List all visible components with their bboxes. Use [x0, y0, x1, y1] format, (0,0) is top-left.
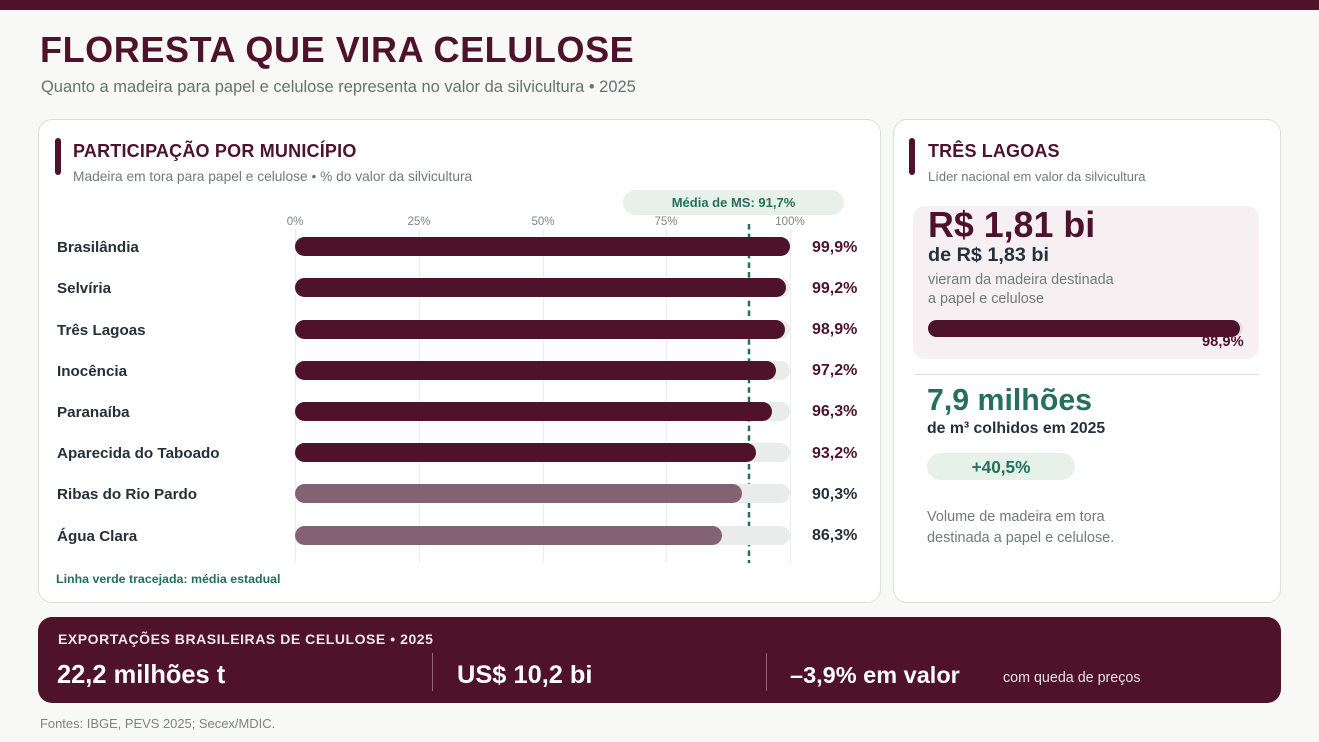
- panel subheading: Madeira em tora para papel e celulose • % do valor da silvicultura: [73, 169, 472, 184]
- volume description: Volume de madeira em tora: [927, 509, 1105, 525]
- text: 75%: [654, 216, 678, 228]
- export note: com queda de preços: [1003, 670, 1140, 686]
- text: 100%: [775, 216, 805, 228]
- bar: Ribas do Rio Pardo: [57, 484, 857, 503]
- export heading: EXPORTAÇÕES BRASILEIRAS DE CELULOSE • 2025: [58, 631, 433, 647]
- state average label: Média de MS: 91,7%: [672, 195, 795, 210]
- panel: participação por município: [38, 119, 881, 603]
- divider: [914, 374, 1259, 375]
- export value: US$ 10,2 bi: [457, 661, 592, 689]
- total value: de R$ 1,83 bi: [928, 244, 1049, 266]
- volume value: 7,9 milhões: [927, 384, 1092, 417]
- text: Água Clara: [57, 528, 137, 545]
- state average label: [623, 190, 844, 215]
- text: 86,3%: [812, 527, 857, 544]
- bar: Inocência: [57, 361, 857, 380]
- value description: vieram da madeira destinada: [928, 272, 1114, 288]
- text: 25%: [407, 216, 431, 228]
- sources: Fontes: IBGE, PEVS 2025; Secex/MDIC.: [40, 716, 275, 731]
- text: 90,3%: [812, 486, 857, 503]
- bar: Selvíria: [57, 278, 857, 297]
- text: Ribas do Rio Pardo: [57, 486, 197, 503]
- top band: [0, 0, 1319, 10]
- axis labels: [287, 216, 805, 563]
- export change: –3,9% em valor: [790, 662, 960, 688]
- panel heading: TRÊS LAGOAS: [928, 141, 1060, 161]
- value description: [928, 272, 1114, 307]
- bar: Três Lagoas: [57, 320, 857, 339]
- text: 93,2%: [812, 445, 857, 462]
- bar: Água Clara: [57, 526, 857, 545]
- text: 98,9%: [812, 321, 857, 338]
- growth pill: +40,5%: [972, 457, 1030, 477]
- text: 99,2%: [812, 280, 857, 297]
- text: Três Lagoas: [57, 322, 146, 339]
- text: Aparecida do Taboado: [57, 445, 220, 462]
- bar: Paranaíba: [57, 402, 857, 421]
- progress value: 98,9%: [1202, 334, 1244, 350]
- panel accent bar: [909, 138, 915, 175]
- value description: a papel e celulose: [928, 291, 1044, 307]
- separator: [766, 653, 767, 691]
- panel accent bar: [55, 138, 61, 175]
- main value: R$ 1,81 bi: [928, 205, 1095, 245]
- volume label: de m³ colhidos em 2025: [927, 420, 1105, 437]
- text: 0%: [287, 216, 303, 228]
- state average dashed line: [748, 224, 750, 563]
- panel heading: PARTICIPAÇÃO POR MUNICÍPIO: [73, 141, 357, 161]
- text: Brasilândia: [57, 239, 139, 256]
- title: FLORESTA QUE VIRA CELULOSE: [40, 29, 634, 70]
- volume description: destinada a papel e celulose.: [927, 530, 1114, 546]
- bar: Brasilândia: [57, 237, 857, 256]
- text: 99,9%: [812, 239, 857, 256]
- panel subheading: Líder nacional em valor da silvicultura: [928, 169, 1146, 184]
- text: Paranaíba: [57, 404, 130, 421]
- volume description: [927, 509, 1114, 546]
- text: Inocência: [57, 363, 127, 380]
- text: Selvíria: [57, 280, 111, 297]
- text: 96,3%: [812, 403, 857, 420]
- bar: Aparecida do Taboado: [57, 443, 857, 462]
- highlight box: [913, 206, 1259, 359]
- text: 97,2%: [812, 362, 857, 379]
- bar chart: [57, 216, 857, 563]
- chart note: Linha verde tracejada: média estadual: [56, 572, 280, 586]
- progress bar: [928, 320, 1243, 337]
- panel: Três Lagoas: [893, 119, 1281, 603]
- growth pill: [927, 453, 1075, 480]
- subtitle: Quanto a madeira para papel e celulose representa no valor da silvicultura • 2025: [41, 78, 636, 96]
- export volume: 22,2 milhões t: [57, 661, 225, 689]
- separator: [432, 653, 433, 691]
- panel: exportações: [38, 617, 1281, 703]
- text: 50%: [531, 216, 555, 228]
